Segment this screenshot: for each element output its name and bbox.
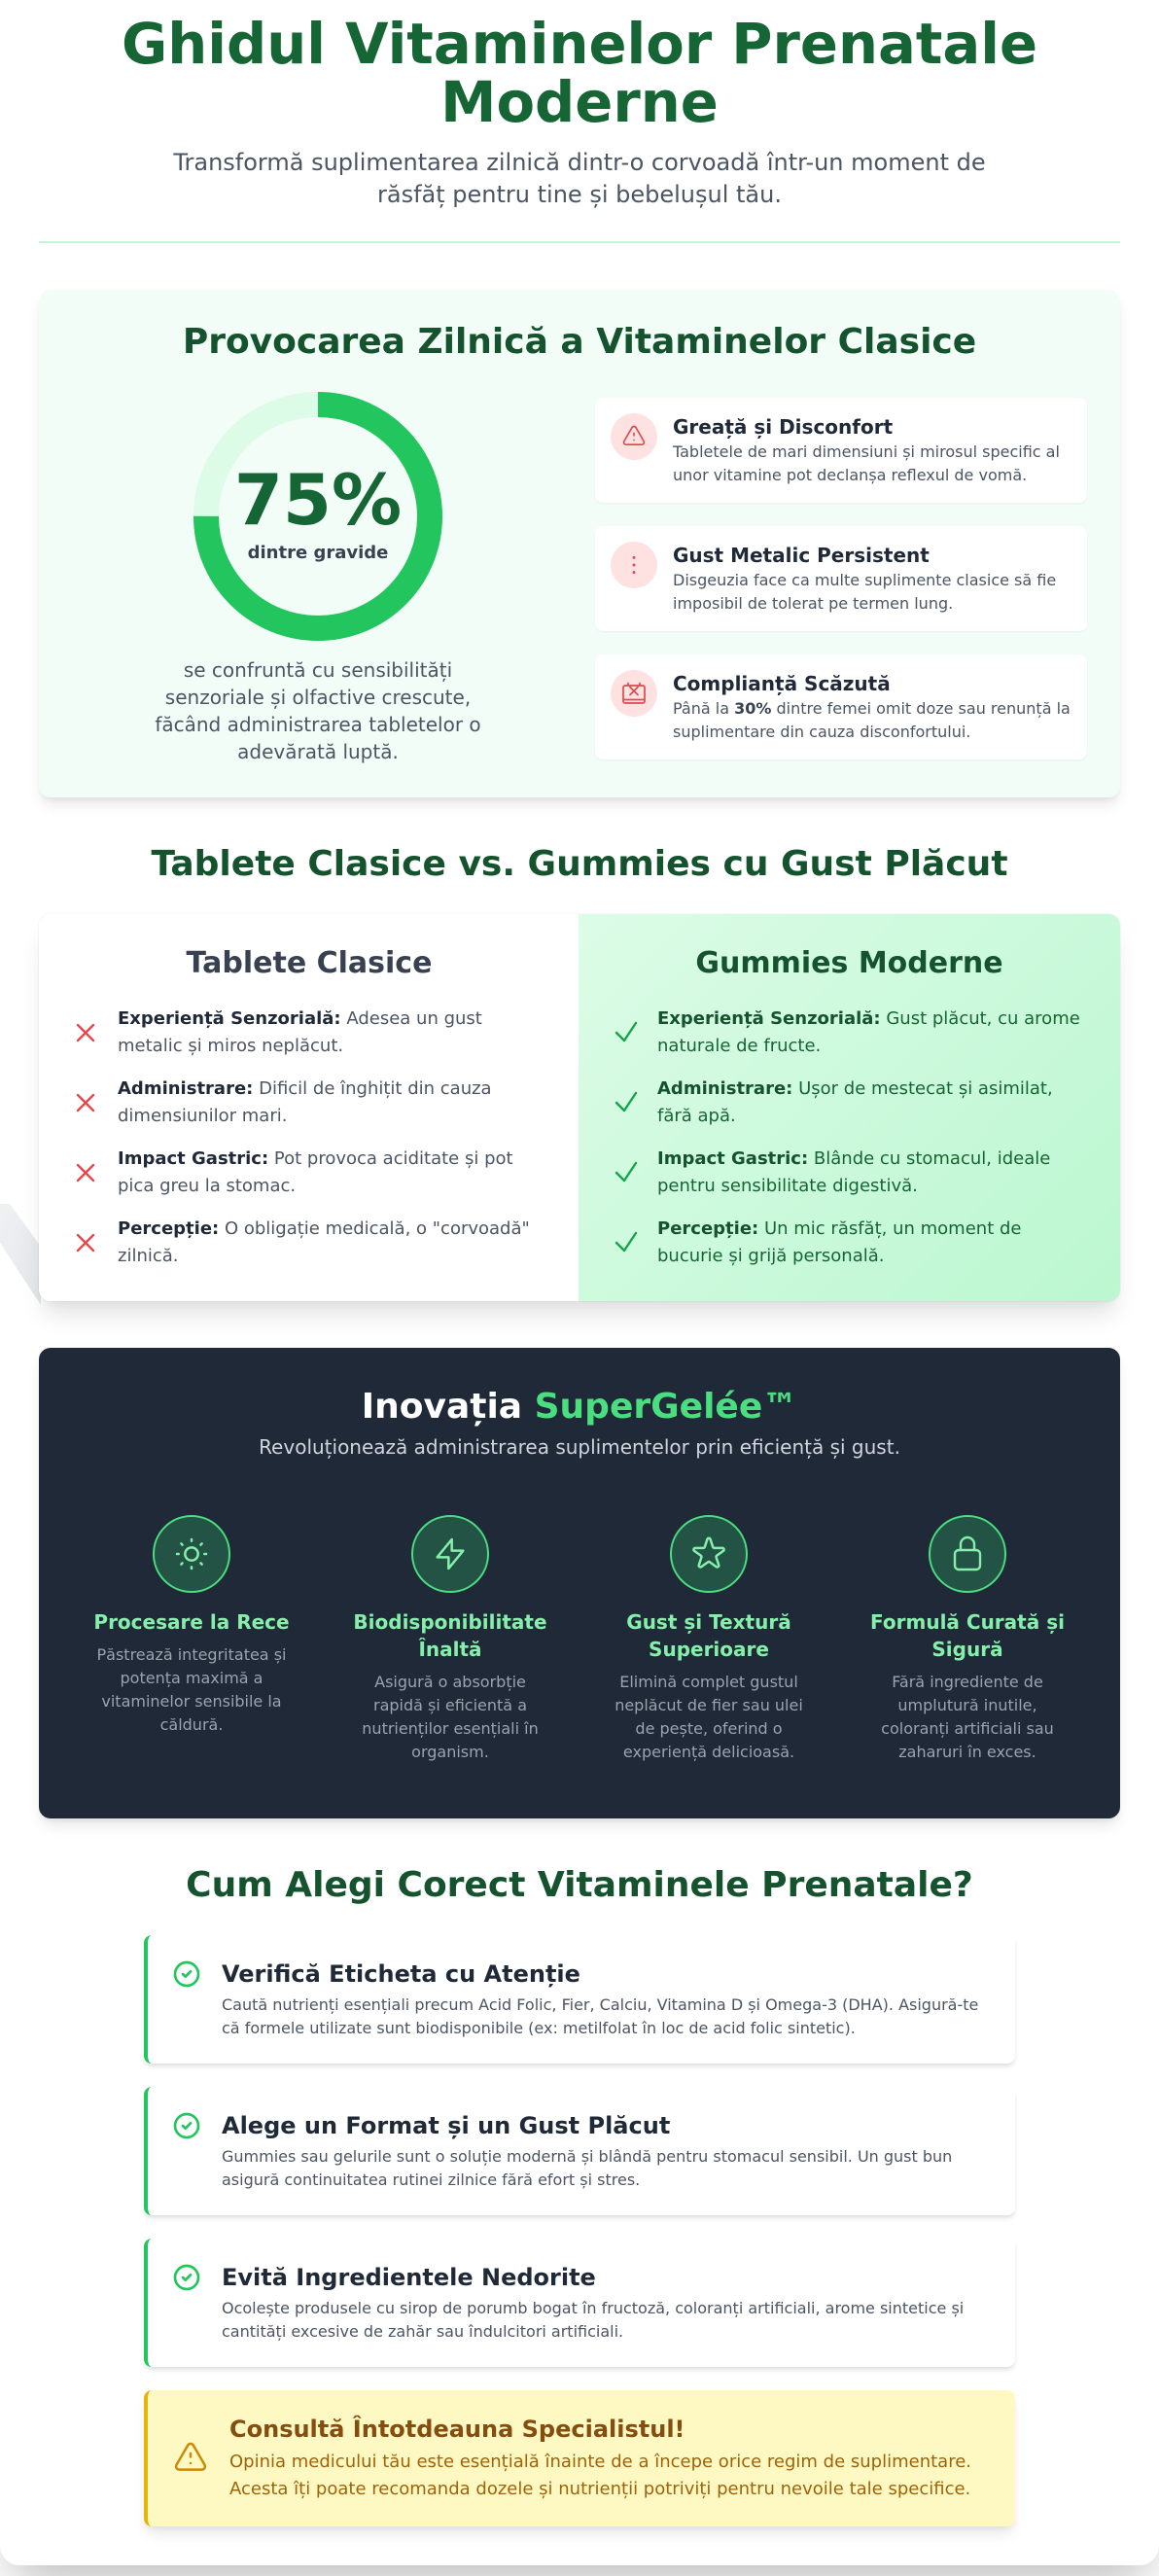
- feature: cold processing: vitaminelor sensibile la: [101, 1692, 282, 1711]
- icon: warning: [175, 2443, 206, 2471]
- subtitle: Transformă suplimentarea zilnică dintr-o corvoadă într-un moment de: [173, 149, 986, 176]
- icon: sun: [153, 1515, 230, 1593]
- list row: naturale de fructe.: [657, 1036, 821, 1056]
- panel: comparison: [39, 914, 1120, 1301]
- card: low compliance: suplimentare din cauza disconfortului.: [673, 723, 970, 741]
- feature: clean formula: zaharuri în exces.: [898, 1743, 1036, 1761]
- feature: cold processing: potența maximă a: [121, 1669, 263, 1687]
- stat description: se confruntă cu sensibilități: [184, 658, 452, 682]
- heading: challenge: Provocarea Zilnică a Vitaminelor Clasice: [183, 322, 976, 362]
- icon: dots: [611, 542, 657, 588]
- feature: clean formula: umplutură inutile,: [897, 1696, 1037, 1714]
- heading: tablets: Tablete Clasice: [187, 946, 432, 980]
- feature: clean formula: [870, 1515, 1065, 1761]
- feature: taste and texture: neplăcut de fier sau ulei: [615, 1696, 803, 1714]
- list row: pentru sensibilitate digestivă.: [657, 1176, 918, 1196]
- panel: innovation: [39, 1348, 1120, 1818]
- column: classic tablets: [39, 914, 579, 1301]
- icon: star: [670, 1515, 748, 1593]
- chart: 75 percent donut: [193, 392, 442, 641]
- chart: 75 percent donut: dintre gravide: [248, 543, 388, 563]
- card: metallic taste: [595, 526, 1087, 631]
- card: nausea: unor vitamine pot declanșa reflexul de vomă.: [673, 466, 1027, 484]
- list row: [76, 1148, 513, 1196]
- icon: check circle: [173, 2264, 200, 2291]
- feature: clean formula: Formulă Curată și: [870, 1610, 1065, 1634]
- list row: Impact Gastric: Pot provoca aciditate și pot: [118, 1148, 513, 1169]
- card: nausea: [595, 398, 1087, 503]
- feature: cold processing: [93, 1515, 290, 1734]
- panel: daily challenge: [39, 290, 1120, 797]
- list row: [615, 1218, 1021, 1266]
- icon: check circle: [173, 1960, 200, 1988]
- step: choose format: asigură continuitatea rutinei zilnice fără efort și stres.: [222, 2170, 640, 2189]
- list row: pica greu la stomac.: [118, 1176, 296, 1196]
- card: nausea: Greață și Disconfort: [673, 415, 893, 439]
- card: low compliance: [595, 654, 1087, 759]
- subtitle: [173, 149, 986, 208]
- feature: taste and texture: Gust și Textură: [626, 1610, 791, 1634]
- card: metallic taste: Gust Metalic Persistent: [673, 544, 930, 567]
- feature: bioavailability: organism.: [411, 1743, 489, 1761]
- list row: bucurie și grijă personală.: [657, 1246, 885, 1266]
- callout: consult specialist: Acesta îți poate recomanda dozele și nutrienții potriviți pentru nevoile tale specifice.: [229, 2479, 970, 2499]
- list row: Experiență Senzorială: Adesea un gust: [118, 1008, 482, 1029]
- list row: Impact Gastric: Blânde cu stomacul, ideale: [657, 1148, 1050, 1169]
- stat description: făcând administrarea tabletelor o: [155, 713, 481, 736]
- list row: zilnică.: [118, 1246, 179, 1266]
- feature: taste and texture: Elimină complet gustul: [619, 1673, 798, 1691]
- list row: Percepție: O obligație medicală, o "corvoadă": [118, 1218, 530, 1239]
- card: metallic taste: imposibil de tolerat pe termen lung.: [673, 594, 953, 613]
- feature: bioavailability: rapidă și eficientă a: [373, 1696, 527, 1714]
- feature: cold processing: Păstrează integritatea și: [97, 1645, 286, 1664]
- list row: fără apă.: [657, 1106, 736, 1126]
- feature: taste and texture: experiență delicioasă.: [623, 1743, 794, 1761]
- list row: Administrare: Dificil de înghițit din cauza: [118, 1078, 492, 1099]
- feature: cold processing: căldură.: [160, 1715, 223, 1734]
- icon: lock: [929, 1515, 1006, 1593]
- callout: consult specialist: Consultă Întotdeauna Specialistul!: [229, 2416, 685, 2443]
- stat description: [155, 658, 481, 763]
- step: choose format: Gummies sau gelurile sunt o soluție modernă și blândă pentru stomacul sensibil. Un gust bun: [222, 2147, 952, 2166]
- decorative shadow shard: [0, 1204, 41, 1305]
- step: avoid ingredients: cantități excesive de zahăr sau îndulcitori artificiali.: [222, 2322, 623, 2341]
- title: Ghidul Vitaminelor Prenatale: [122, 12, 1037, 77]
- list row: dimensiunilor mari.: [118, 1106, 287, 1126]
- heading: comparison: Tablete Clasice vs. Gummies cu Gust Plăcut: [151, 844, 1008, 884]
- feature: bioavailability: nutrienților esențiali în: [362, 1719, 539, 1738]
- icon: bolt: [411, 1515, 489, 1593]
- heading: how to choose: Cum Alegi Corect Vitaminele Prenatale?: [186, 1865, 973, 1905]
- title: Moderne: [440, 70, 719, 135]
- card: low compliance: Complianță Scăzută: [673, 672, 891, 695]
- feature: clean formula: coloranți artificiali sau: [881, 1719, 1054, 1738]
- icon: check circle: [173, 2112, 200, 2139]
- feature: cold processing: Procesare la Rece: [93, 1610, 290, 1634]
- list row: [76, 1078, 492, 1126]
- icon: warning: [611, 413, 657, 460]
- subtitle: răsfăț pentru tine și bebelușul tău.: [377, 181, 782, 208]
- heading: gummies: Gummies Moderne: [695, 946, 1003, 980]
- icon: calendar x: [611, 670, 657, 717]
- list row: metalic și miros neplăcut.: [118, 1036, 343, 1056]
- feature: bioavailability: Înaltă: [418, 1638, 482, 1661]
- column: modern gummies: [579, 914, 1120, 1301]
- step: check label: [144, 1935, 1015, 2064]
- step: choose format: Alege un Format și un Gust Plăcut: [222, 2112, 670, 2139]
- stat description: senzoriale și olfactive crescute,: [165, 686, 471, 709]
- list row: [615, 1078, 1053, 1126]
- card: metallic taste: Disgeuzia face ca multe suplimente clasice să fie: [673, 571, 1056, 589]
- card: nausea: Tabletele de mari dimensiuni și mirosul specific al: [673, 442, 1060, 461]
- step: check label: Caută nutrienți esențiali precum Acid Folic, Fier, Calciu, Vitamina D și Omega-3 (DHA). Asigură-te: [222, 1995, 978, 2014]
- list row: Experiență Senzorială: Gust plăcut, cu arome: [657, 1008, 1080, 1029]
- title: [122, 12, 1037, 135]
- list row: Percepție: Un mic răsfăț, un moment de: [657, 1218, 1021, 1239]
- feature: taste and texture: [615, 1515, 803, 1761]
- feature: taste and texture: Superioare: [649, 1638, 769, 1661]
- feature: bioavailability: Asigură o absorbție: [374, 1673, 526, 1691]
- feature: clean formula: Sigură: [931, 1638, 1003, 1661]
- step: check label: că formele utilizate sunt biodisponibile (ex: metilfolat în loc de acid folic sintetic).: [222, 2019, 856, 2037]
- step: choose format: [144, 2087, 1015, 2215]
- step: avoid ingredients: Evită Ingredientele Nedorite: [222, 2264, 596, 2291]
- feature: bioavailability: Biodisponibilitate: [353, 1610, 547, 1634]
- callout: consult specialist: [144, 2390, 1015, 2526]
- step: avoid ingredients: Ocolește produsele cu sirop de porumb bogat în fructoză, coloranți artificiali, arome sintetice și: [222, 2299, 964, 2317]
- stat description: adevărată luptă.: [237, 740, 399, 763]
- step: avoid ingredients: [144, 2239, 1015, 2367]
- feature: clean formula: Fără ingrediente de: [892, 1673, 1043, 1691]
- list row: [615, 1008, 1080, 1056]
- chart: 75 percent donut: 75%: [234, 459, 402, 541]
- list row: [76, 1008, 482, 1056]
- heading: innovation: Inovația SuperGelée™: [362, 1387, 797, 1427]
- feature: bioavailability: [353, 1515, 547, 1761]
- callout: consult specialist: Opinia medicului tău este esențială înainte de a începe orice regim de suplimentare.: [229, 2452, 971, 2472]
- list row: [76, 1218, 530, 1266]
- step: check label: Verifică Eticheta cu Atenție: [222, 1960, 580, 1988]
- card: low compliance: Până la 30% dintre femei omit doze sau renunță la: [673, 699, 1071, 718]
- feature: taste and texture: de pește, oferind o: [635, 1719, 783, 1738]
- subheading: innovation: Revoluționează administrarea suplimentelor prin eficiență și gust.: [259, 1435, 900, 1459]
- list row: Administrare: Ușor de mestecat și asimilat,: [657, 1078, 1053, 1099]
- list row: [615, 1148, 1050, 1196]
